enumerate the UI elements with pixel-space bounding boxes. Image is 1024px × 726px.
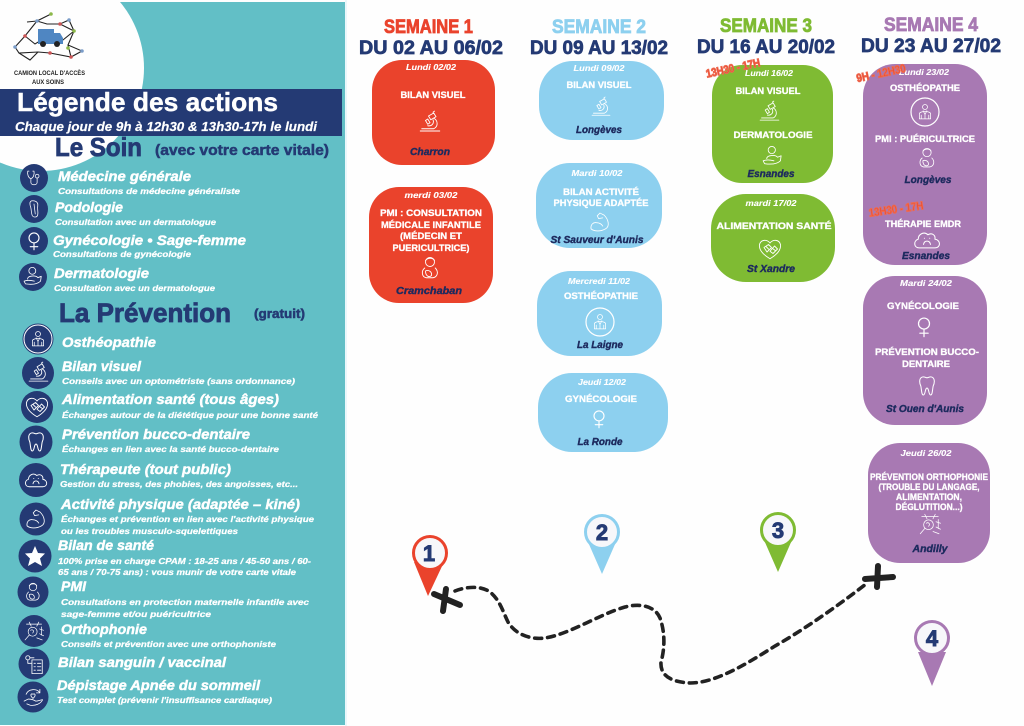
item: bilan visuel: Conseils avec un optométriste (sans ordonnance) <box>62 376 295 386</box>
card: lundi 09/02: Lundi 09/02 <box>574 63 625 73</box>
card: lundi 23/02 <box>863 64 987 265</box>
week 2 heading: DU 09 AU 13/02 <box>530 38 668 59</box>
card: jeudi 26/02 <box>868 443 990 563</box>
item: gynécologie: Consultations de gynécologie <box>53 249 191 259</box>
card: mardi 10/02 <box>536 163 662 248</box>
banner: légende des actions <box>0 87 342 136</box>
card: mercredi 11/02: Mercredi 11/02 <box>568 276 630 286</box>
item: osthéopathie: Osthéopathie <box>62 334 156 350</box>
item: podologie <box>20 195 216 227</box>
card: merdi 03/02: merdi 03/02 <box>404 190 458 200</box>
item: thérapeute <box>19 461 298 497</box>
item: dermatologie: Dermatologie <box>54 265 149 281</box>
banner: légende des actions: Chaque jour de 9h à 12h30 & 13h30-17h le lundi <box>15 120 318 134</box>
item: médecine générale: Consultations de médecine généraliste <box>58 186 240 196</box>
card: lundi 02/02 <box>372 60 495 165</box>
card: mercredi 11/02: La Laigne <box>577 339 623 351</box>
logo: truck network <box>13 12 86 86</box>
item: activité physique: Échanges et prévention en lien avec l'activité physique <box>61 514 314 524</box>
pin 1: 1 <box>423 541 435 566</box>
pin 4 <box>916 622 948 686</box>
item: dépistage apnée <box>18 677 272 712</box>
card: jeudi 26/02: (TROUBLE DU LANGAGE, <box>878 482 980 493</box>
logo: truck network: AUX SOINS <box>32 79 65 86</box>
card: jeudi 26/02: Jeudi 26/02 <box>900 448 952 458</box>
pin 1 <box>414 536 446 596</box>
item: prévention bucco-dentaire <box>20 426 279 458</box>
card: mardi 24/02: Mardi 24/02 <box>900 278 952 288</box>
time tag: 13h30-17h semaine 4: 13H30 - 17H <box>868 200 924 220</box>
item: pmi: Consultations en protection maternelle infantile avec <box>61 597 309 607</box>
card: lundi 16/02: Lundi 16/02 <box>745 68 793 78</box>
logo: truck network: CAMION LOCAL D'ACCÈS <box>14 68 86 77</box>
card: lundi 02/02: Lundi 02/02 <box>406 62 456 72</box>
item: podologie: Podologie <box>55 199 123 215</box>
card: lundi 09/02: Longèves <box>576 124 622 136</box>
card: mercredi 11/02: OSTHÉOPATHIE <box>564 291 638 302</box>
item: alimentation santé: Échanges autour de la diététique pour une bonne santé <box>62 410 318 420</box>
card: mardi 24/02: GYNÉCOLOGIE <box>887 301 959 312</box>
item: activité physique: ou les troubles musculo-squelettiques <box>61 526 238 536</box>
card: mardi 17/02: St Xandre <box>747 263 795 275</box>
card: lundi 23/02: THÉRAPIE EMDR <box>885 219 961 230</box>
item: dépistage apnée: Test complet (prévenir l'insuffisance cardiaque) <box>57 695 272 705</box>
item: bilan de santé: 65 ans / 70-75 ans) : vous munir de votre carte vitale <box>58 567 296 577</box>
item: orthophonie: Orthophonie <box>61 621 147 637</box>
card: lundi 23/02: OSTHÉOPATHE <box>890 83 960 94</box>
card: mardi 17/02: ALIMENTATION SANTÉ <box>716 221 832 232</box>
card: mardi 10/02: St Sauveur d'Aunis <box>550 234 644 246</box>
heading: le soin: (avec votre carte vitale) <box>155 143 329 159</box>
item: activité physique <box>20 496 314 536</box>
item: orthophonie: Conseils et prévention avec une orthophoniste <box>61 639 276 649</box>
pin 3 <box>762 514 794 572</box>
item: bilan sanguin: Bilan sanguin / vaccinal <box>58 654 227 670</box>
card: mardi 24/02: St Ouen d'Aunis <box>886 403 964 415</box>
banner: légende des actions: Légende des actions <box>17 87 278 117</box>
card: mardi 10/02: Mardi 10/02 <box>572 168 623 178</box>
card: mardi 24/02 <box>863 276 987 425</box>
card: mardi 17/02: mardi 17/02 <box>746 198 797 208</box>
item: bilan sanguin <box>18 648 227 680</box>
card: merdi 03/02 <box>369 187 493 303</box>
pin 3: 3 <box>772 518 784 543</box>
week 3 heading: DU 16 AU 20/02 <box>697 37 835 58</box>
panel: legend <box>0 0 347 726</box>
item: alimentation santé <box>21 391 318 423</box>
pin 2: 2 <box>596 520 608 545</box>
item: activité physique: Activité physique (adaptée – kiné) <box>60 496 300 512</box>
item: thérapeute: Thérapeute (tout public) <box>60 461 231 477</box>
card: merdi 03/02: MÉDICALE INFANTILE <box>381 220 481 231</box>
item: pmi <box>18 576 309 619</box>
card: lundi 16/02: DERMATOLOGIE <box>734 130 812 141</box>
card: merdi 03/02: (MÉDECIN ET <box>400 231 462 242</box>
week 1 heading: SEMAINE 1 <box>384 17 473 38</box>
item: bilan de santé: 100% prise en charge CPAM : 18-25 ans / 45-50 ans / 60- <box>58 556 311 566</box>
week 2 heading <box>530 17 668 59</box>
card: lundi 02/02: Charron <box>410 146 450 158</box>
card: lundi 09/02: BILAN VISUEL <box>566 80 632 91</box>
card: lundi 23/02: Esnandes <box>902 250 950 262</box>
pin 2 <box>586 516 618 574</box>
week 4 heading: SEMAINE 4 <box>884 15 978 36</box>
week 3 heading: SEMAINE 3 <box>720 16 812 37</box>
card: jeudi 12/02: La Ronde <box>578 436 623 448</box>
week 1 heading: DU 02 AU 06/02 <box>359 38 503 59</box>
card: lundi 02/02: BILAN VISUEL <box>400 90 466 101</box>
cross: end <box>865 566 893 587</box>
item: prévention bucco-dentaire: Prévention bucco-dentaire <box>62 426 250 442</box>
item: dépistage apnée: Dépistage Apnée du sommeil <box>57 677 261 693</box>
item: podologie: Consultation avec un dermatologue <box>55 217 216 227</box>
pin 4: 4 <box>926 626 939 651</box>
week 2 heading: SEMAINE 2 <box>552 17 646 38</box>
item: médecine générale <box>20 164 240 196</box>
week 4 heading: DU 23 AU 27/02 <box>861 36 1001 57</box>
item: gynécologie: Gynécologie • Sage-femme <box>53 232 246 248</box>
week 3 heading <box>697 16 835 58</box>
heading: le soin: Le Soin <box>55 132 142 162</box>
cross: start <box>434 589 460 611</box>
time tag: 9h-12h30 semaine 4: 9H - 12H30 <box>856 63 907 85</box>
item: bilan de santé <box>18 537 311 577</box>
card: merdi 03/02: PUERICULTRICE) <box>392 243 470 254</box>
item: dermatologie: Consultation avec un dermatologue <box>54 283 215 293</box>
item: pmi: sage-femme et/ou puéricultrice <box>61 609 211 619</box>
week 1 heading <box>359 17 503 59</box>
card: lundi 16/02: Esnandes <box>748 168 795 180</box>
card: merdi 03/02: Cramchaban <box>396 285 462 297</box>
card: lundi 23/02: PMI : PUÉRICULTRICE <box>875 134 975 145</box>
card: jeudi 12/02: Jeudi 12/02 <box>578 377 626 387</box>
card: mardi 24/02: DENTAIRE <box>902 359 950 370</box>
card: jeudi 12/02: GYNÉCOLOGIE <box>565 394 637 405</box>
card: jeudi 26/02: DÉGLUTITION...) <box>896 502 962 513</box>
item: alimentation santé: Alimentation santé (tous âges) <box>61 391 279 407</box>
item: prévention bucco-dentaire: Échanges en lien avec la santé bucco-dentaire <box>62 444 279 454</box>
time tag: 13h30-17h semaine 3: 13H30 - 17H <box>705 57 761 81</box>
item: pmi: PMI <box>61 578 87 594</box>
item: médecine générale: Médecine générale <box>58 168 191 184</box>
card: lundi 23/02: Longèves <box>904 174 952 186</box>
card: mercredi 11/02 <box>537 271 662 356</box>
card: jeudi 26/02: PRÉVENTION ORTHOPHONIE <box>870 472 988 483</box>
card: jeudi 12/02 <box>538 373 668 452</box>
item: bilan de santé: Bilan de santé <box>58 537 154 553</box>
item: thérapeute: Gestion du stress, des phobies, des angoisses, etc... <box>60 479 298 489</box>
card: jeudi 26/02: Andilly <box>912 543 949 555</box>
item: osthéopathie <box>22 324 156 354</box>
item: bilan visuel: Bilan visuel <box>62 358 142 374</box>
heading: la prévention: (gratuit) <box>254 307 305 321</box>
week 4 heading <box>861 15 1001 57</box>
card: mardi 24/02: PRÉVENTION BUCCO- <box>875 347 979 358</box>
item: orthophonie <box>18 615 276 649</box>
card: lundi 09/02 <box>539 61 664 140</box>
card: lundi 16/02: BILAN VISUEL <box>736 86 801 97</box>
white circle behind logo <box>0 0 144 171</box>
heading: la prévention: La Prévention <box>59 298 231 328</box>
card: merdi 03/02: PMI : CONSULTATION <box>380 208 482 219</box>
item: bilan visuel <box>22 357 295 389</box>
card: lundi 16/02 <box>712 65 833 183</box>
card: mardi 10/02: PHYSIQUE ADAPTÉE <box>554 198 648 209</box>
route: dashed path with crosses <box>434 566 893 683</box>
item: dermatologie <box>19 263 215 293</box>
card: jeudi 26/02: ALIMENTATION, <box>896 492 962 503</box>
item: gynécologie <box>20 227 246 259</box>
card: mardi 17/02 <box>711 194 835 282</box>
heading: le soin <box>55 132 329 162</box>
card: lundi 23/02: Lundi 23/02 <box>899 67 949 77</box>
card: mardi 10/02: BILAN ACTIVITÉ <box>563 187 639 198</box>
